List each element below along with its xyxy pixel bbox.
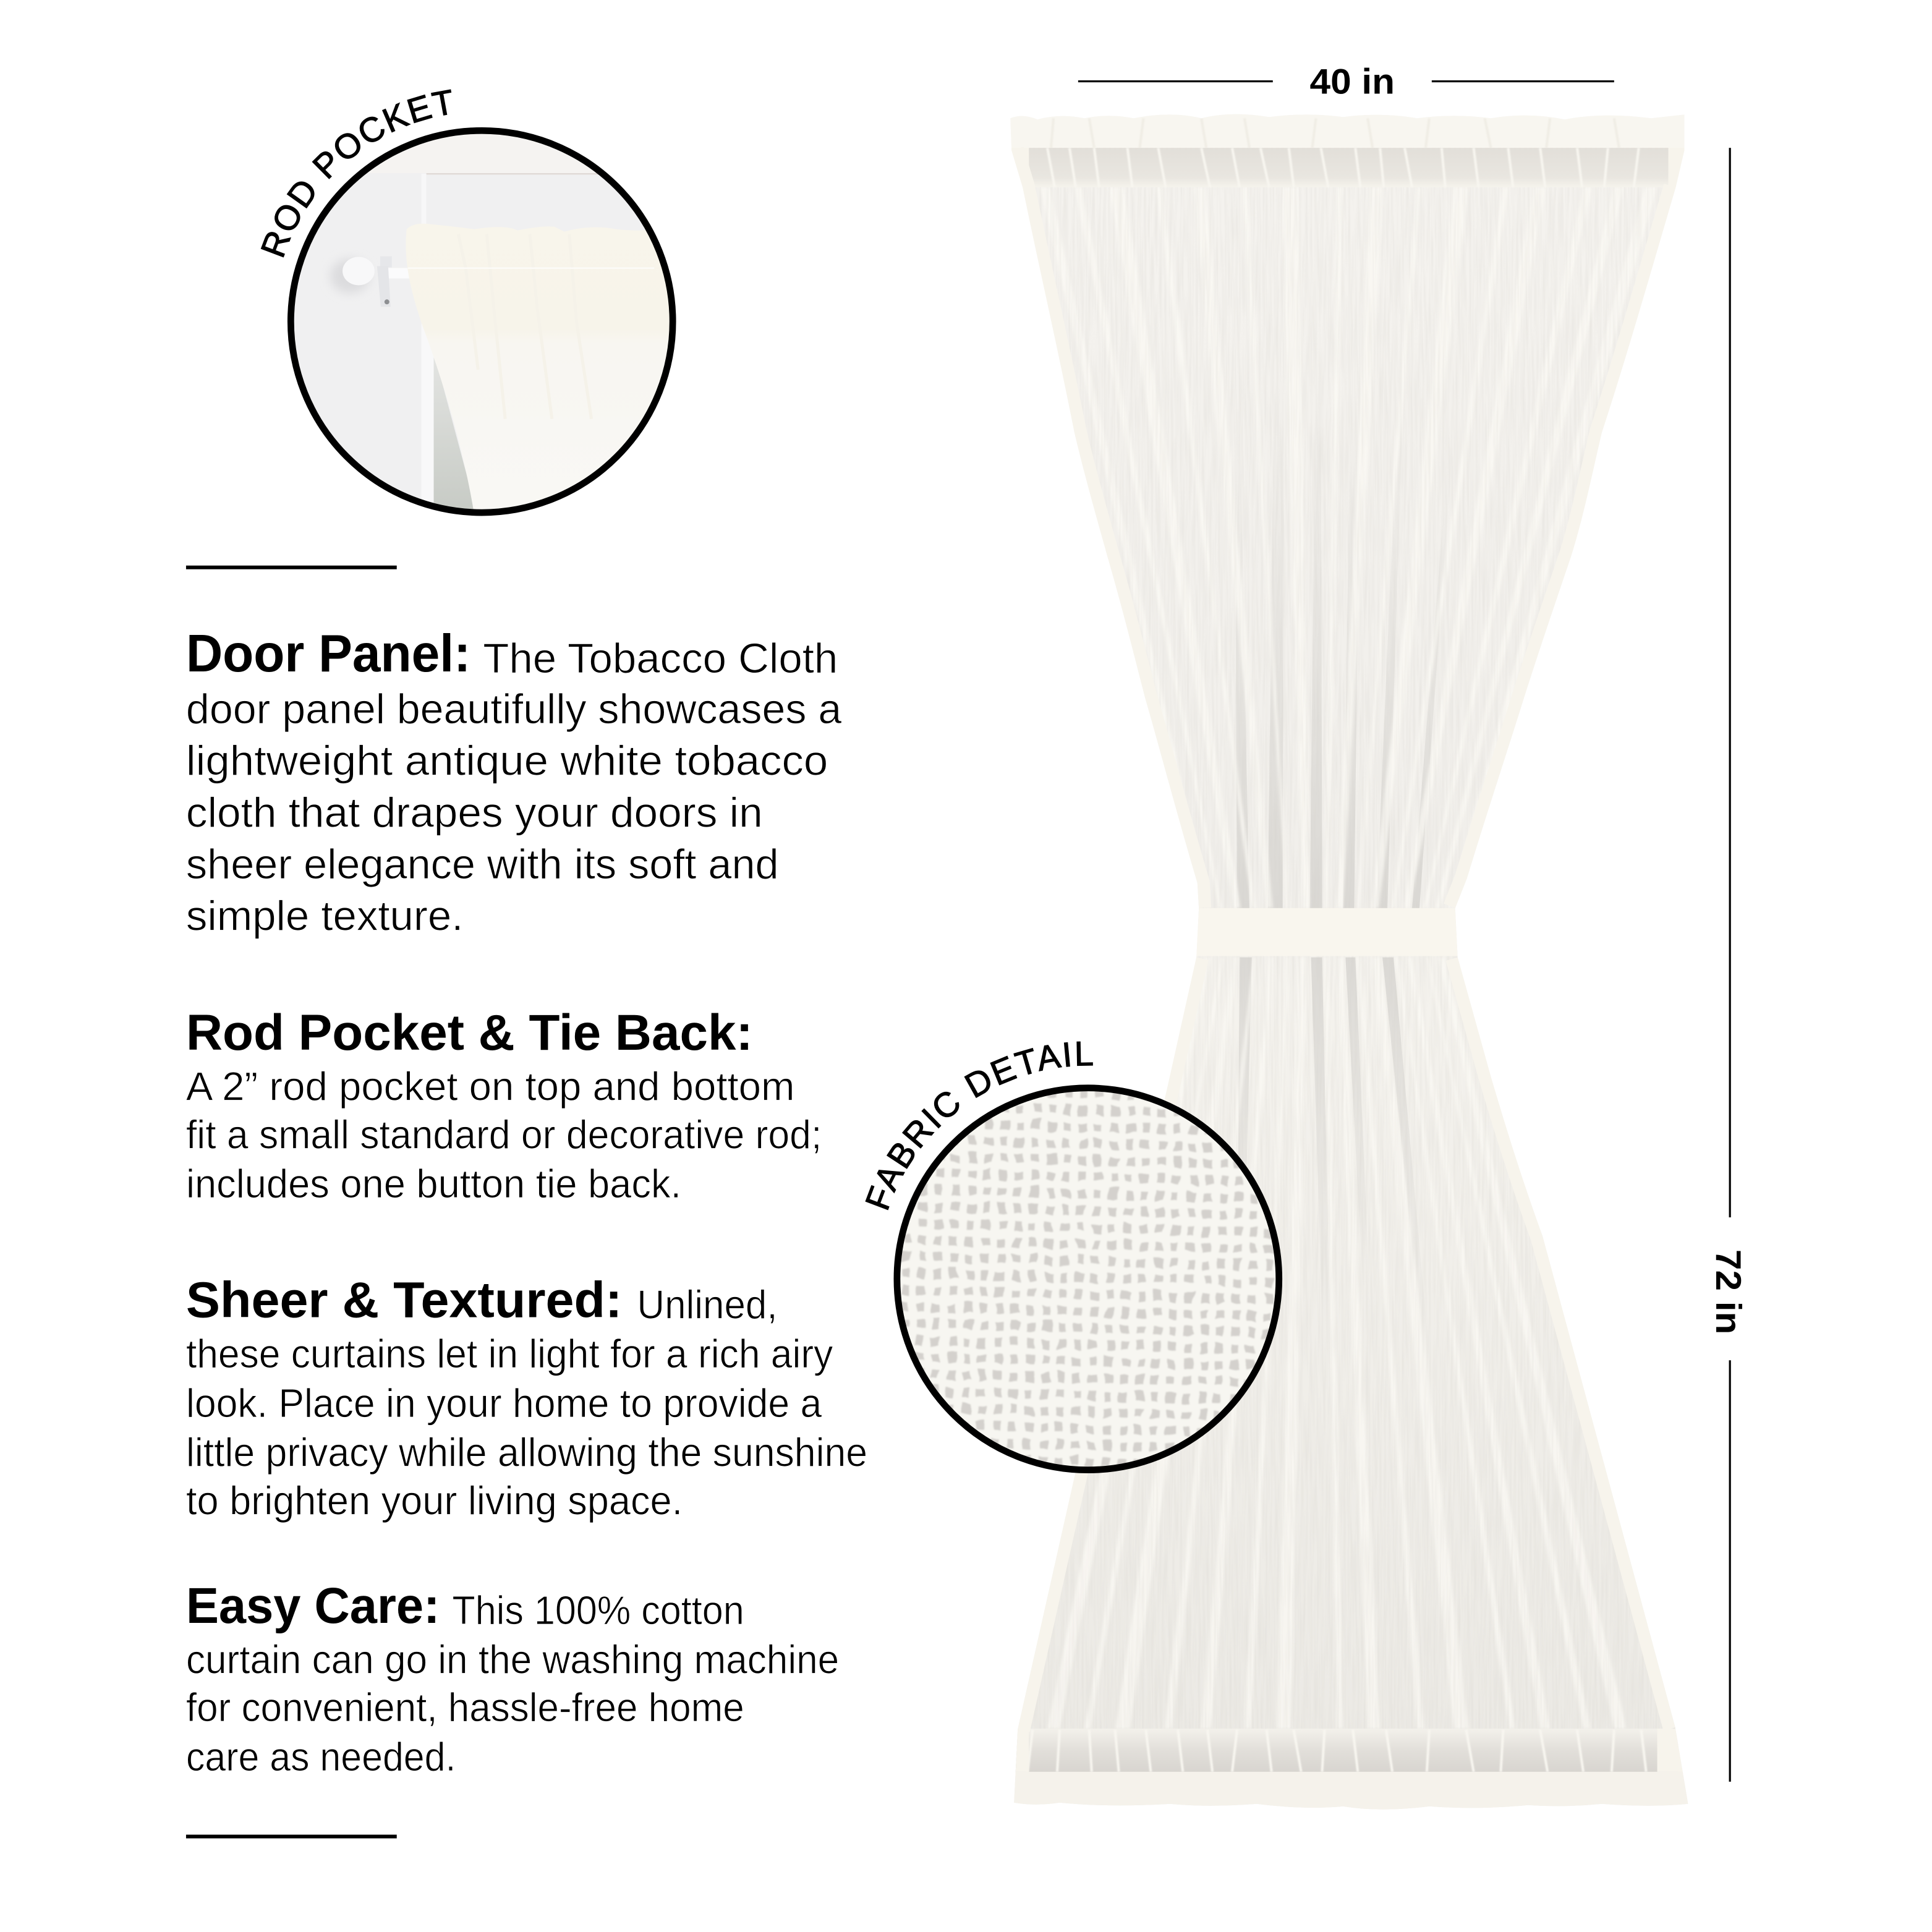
- fabric texture: [887, 1078, 1289, 1480]
- body door panel: lightweight antique white tobacco: [186, 738, 828, 785]
- bottom rod pocket band: [998, 1729, 1678, 1772]
- body door panel: sheer elegance with its soft and: [186, 841, 779, 888]
- corner hems: [1000, 148, 1694, 1772]
- body sheer and textured: look. Place in your home to provide a: [186, 1381, 822, 1426]
- rod finial: [343, 257, 375, 285]
- door trim: [357, 123, 684, 173]
- text block: sheer and textured: [186, 1272, 867, 1523]
- top header ruffle: [998, 108, 1700, 149]
- callout: rod pocket: [261, 89, 676, 516]
- rod pocket seam: [408, 267, 654, 269]
- body rod pocket: [186, 1064, 822, 1206]
- width dimension line right: [1432, 80, 1614, 82]
- body easy care: curtain can go in the washing machine: [186, 1636, 839, 1682]
- circle outline: [291, 130, 673, 513]
- heading easy care: Easy Care:: [186, 1578, 440, 1634]
- body sheer and textured: Unlined,: [637, 1282, 778, 1327]
- body sheer and textured: [186, 1282, 867, 1523]
- curtain fabric body: [1031, 187, 1675, 1729]
- heading rod pocket and tie back: Rod Pocket & Tie Back:: [186, 1005, 753, 1061]
- upper shadow gaps near tie back: [1236, 556, 1438, 908]
- divider bottom: [186, 1835, 397, 1839]
- text block: easy care: [186, 1578, 839, 1779]
- header gathers: [1051, 118, 1619, 148]
- body door panel: door panel beautifully showcases a: [186, 686, 842, 733]
- lower shadow gaps: [1238, 957, 1415, 1199]
- bracket back plate: [380, 257, 392, 267]
- 40 in width dimension: [1078, 62, 1614, 101]
- curved label rod pocket: ROD POCKET: [261, 89, 451, 257]
- curved label fabric detail: FABRIC DETAIL: [865, 1041, 1093, 1211]
- body door panel: The Tobacco Cloth: [483, 636, 838, 682]
- tie back: [1196, 908, 1458, 956]
- height label: 72 in: [1708, 1249, 1748, 1334]
- height dimension line top: [1729, 148, 1731, 1217]
- body sheer and textured: little privacy while allowing the sunshine: [186, 1430, 867, 1475]
- upper drape folds: [1151, 453, 1522, 908]
- body door panel: [186, 636, 842, 940]
- weave streak texture: [1065, 190, 1638, 1711]
- heading door panel: Door Panel:: [186, 624, 470, 683]
- finial shadow: [330, 259, 370, 293]
- door edge: [422, 174, 427, 236]
- rod bracket: [377, 266, 391, 307]
- top rod pocket band: [1029, 148, 1669, 187]
- body sheer and textured: these curtains let in light for a rich airy: [186, 1331, 833, 1376]
- width label: 40 in: [1310, 62, 1395, 101]
- bottom band pleats: [1028, 1730, 1646, 1772]
- window gap: [434, 351, 478, 517]
- callout: fabric detail: [865, 1041, 1282, 1473]
- curtain side hems: [1011, 150, 1675, 1729]
- body easy care: for convenient, hassle-free home: [186, 1685, 744, 1730]
- height dimension line bottom: [1729, 1360, 1731, 1782]
- wall: [283, 123, 684, 524]
- curtain pleats: [458, 234, 592, 419]
- heading sheer and textured: Sheer & Textured:: [186, 1272, 622, 1329]
- body rod pocket: fit a small standard or decorative rod;: [186, 1112, 822, 1157]
- bottom header ruffle: [998, 1772, 1700, 1821]
- top band pleats: [1047, 148, 1639, 187]
- body rod pocket: A 2” rod pocket on top and bottom: [186, 1064, 794, 1109]
- width dimension line left: [1078, 80, 1273, 82]
- body rod pocket: includes one button tie back.: [186, 1161, 681, 1206]
- circle outline: [897, 1088, 1279, 1470]
- lower drape folds: [1047, 958, 1627, 1729]
- text block: door panel: [186, 624, 842, 940]
- divider top: [186, 566, 397, 569]
- curtain in photo: [406, 224, 690, 524]
- rod pocket photo: [283, 123, 690, 524]
- body door panel: cloth that drapes your doors in: [186, 789, 763, 836]
- body easy care: care as needed.: [186, 1734, 456, 1779]
- body easy care: [186, 1588, 839, 1779]
- bracket screw: [385, 299, 389, 304]
- panel: curtain: [998, 108, 1700, 1821]
- 72 in height dimension: [1708, 148, 1748, 1782]
- body door panel: simple texture.: [186, 893, 463, 940]
- body sheer and textured: to brighten your living space.: [186, 1478, 683, 1523]
- text block: rod pocket and tie back: [186, 1005, 822, 1206]
- body easy care: This 100% cotton: [452, 1588, 744, 1633]
- curtain rod: [385, 268, 409, 278]
